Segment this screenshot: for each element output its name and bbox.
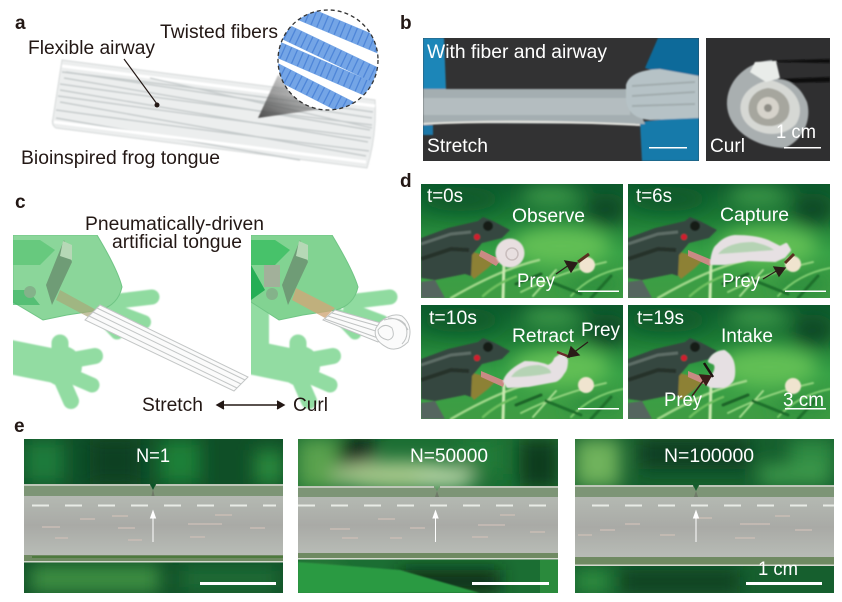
text: curl: Curl [710,136,745,157]
text: flexible airway: Flexible airway [28,38,156,59]
curled tongue [323,310,410,349]
photo: N=100000 [575,439,834,593]
photo: t=0s observe: t=0s [427,186,463,207]
panel: c [0,192,410,416]
callout: flexible airway leader [124,59,160,108]
photo: curl [706,38,830,161]
arrow: N=1 crack [150,511,156,542]
label d: d [400,171,412,192]
upper hand [100,297,152,333]
magnified twisted fibers circle [277,9,379,111]
head [251,235,358,320]
frog model: curl state [240,235,410,401]
text: curl: Curl [293,395,328,416]
text: N=50000: N=50000 [410,446,488,467]
photo: t=19s intake: Intake [721,326,773,347]
photo: t=0s observe: Observe [512,206,585,227]
frog model: stretch state [0,235,248,401]
zoom shadow wedge [258,75,328,118]
text: 1 cm: 1 cm [758,559,798,580]
photo: t=19s intake [628,305,835,419]
arrow: N=100000 crack [694,511,698,542]
text: N=100000: N=100000 [664,446,754,467]
photo: t=6s capture [628,184,835,298]
text: N=1: N=1 [136,446,170,467]
arm and lower hand [0,343,95,401]
photo: N=1 [24,439,283,593]
scale bar [746,582,822,585]
arrow: N=50000 crack [433,511,438,542]
scale bar [200,582,276,585]
text: stretch: Stretch [142,395,203,416]
photo: t=10s retract: Retract [512,326,575,347]
text: twisted fibers: Twisted fibers [160,22,278,43]
text: 1 cm scale: 1 cm [776,122,816,143]
stretched tongue [85,305,248,391]
head [13,235,122,320]
text: with fiber and airway: With fiber and airway [427,42,608,63]
scale bar [472,582,549,585]
frog tongue body [52,60,375,168]
upper hand [338,297,390,333]
text: bioinspired frog tongue: Bioinspired frog tongue [21,148,220,169]
photo: t=6s capture: t=6s [636,186,672,207]
panel: b [400,13,830,161]
panel: a [15,8,390,169]
photo: t=19s intake: Prey [664,390,702,411]
text: pneumatically-driven: Pneumatically-driven [85,214,264,235]
label e: e [14,416,25,437]
panel: e [14,416,834,593]
photo: stretch [423,38,699,161]
scale bar [784,147,821,148]
photo: t=19s intake: t=19s [637,308,684,329]
photo: t=0s observe: Prey [517,271,555,292]
text: artificial tongue: artificial tongue [112,232,242,253]
photo: N=50000 [298,439,558,593]
photo: t=10s retract: Prey [581,320,620,341]
label a: a [15,13,26,34]
photo: t=0s observe [421,184,628,298]
text: stretch: Stretch [427,136,488,157]
scale bar [649,147,687,148]
photo: t=19s intake: 3 cm [783,390,824,411]
photo: t=10s retract [421,305,628,419]
arrow: stretch to curl [217,401,284,409]
label c: c [15,192,26,213]
arm and lower hand [240,300,333,401]
photo: t=6s capture: Prey [722,271,760,292]
photo: t=6s capture: Capture [720,205,789,226]
photo: t=10s retract: t=10s [429,308,477,329]
panel: d [400,171,835,419]
label b: b [400,13,412,34]
